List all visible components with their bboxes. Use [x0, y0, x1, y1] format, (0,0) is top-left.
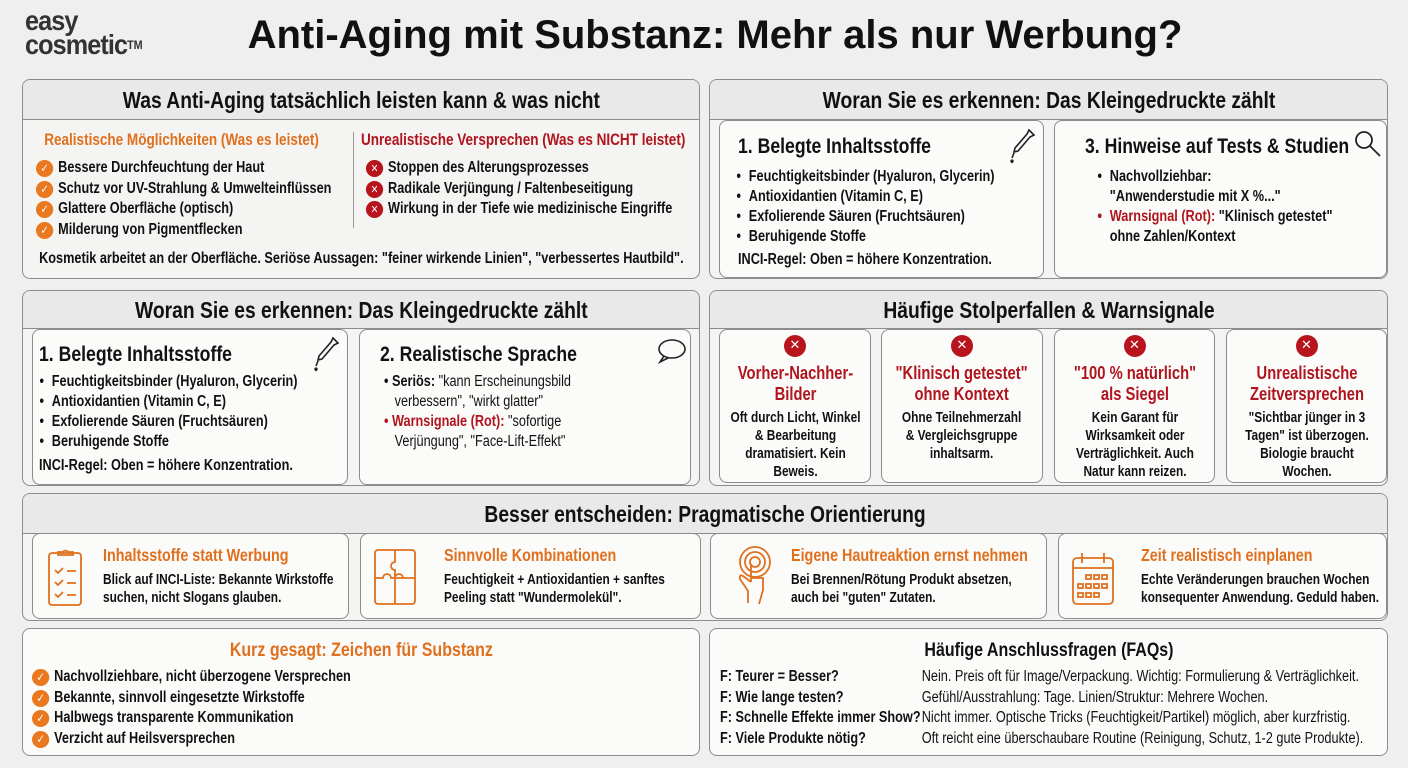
- card: 100% natürlich: Verträglichkeit. Auch: [1076, 446, 1193, 462]
- card: Belegte Inhaltsstoffe: Antioxidantien (Vitamin C, E): [749, 188, 923, 205]
- card: Belegte Inhaltsstoffe: INCI-Regel: Oben = höhere Konzentration.: [738, 251, 992, 268]
- panel: was Anti-Aging leisten kann: [22, 79, 700, 279]
- card: Realistische Sprache: verbessern", "wirkt glatter": [395, 393, 543, 410]
- icon: dropper: [1010, 128, 1036, 164]
- icon: calendar: [1072, 553, 1114, 605]
- card: Hautreaktion: auch bei "guten" Zutaten.: [791, 590, 936, 606]
- card: Belegte Inhaltsstoffe: Beruhigende Stoffe: [749, 228, 866, 245]
- card: Klinisch getestet: ohne Kontext: [915, 384, 1009, 404]
- panel: Kleingedruckte (top right): [709, 79, 1388, 279]
- card: Belegte Inhaltsstoffe: Antioxidantien (Vitamin C, E): [52, 393, 226, 410]
- icon: speech bubble: [658, 339, 686, 364]
- faq list: F: Teurer = Besser?: [720, 668, 839, 685]
- panel: Kleingedruckte (middle left): [22, 290, 700, 486]
- icon: puzzle: [374, 549, 416, 605]
- faq list: Nein. Preis oft für Image/Verpackung. Wichtig: Formulierung & Verträglichkeit.: [922, 668, 1359, 685]
- card: Klinisch getestet: inhaltsarm.: [930, 446, 994, 462]
- card: Zeitversprechen: Wochen.: [1282, 464, 1331, 480]
- heading: [710, 80, 1387, 120]
- card: Tests & Studien: 3. Hinweise auf Tests & Studien: [1085, 134, 1349, 158]
- faq list: F: Schnelle Effekte immer Show?: [720, 709, 921, 726]
- card: Vorher-Nachher: Oft durch Licht, Winkel: [730, 410, 860, 426]
- logo: easy: [25, 5, 77, 36]
- card: Belegte Inhaltsstoffe: Feuchtigkeitsbinder (Hyaluron, Glycerin): [52, 373, 298, 390]
- panel: Besser entscheiden: [22, 493, 1388, 621]
- card: Vorher-Nachher: ✕: [790, 338, 800, 353]
- card: Tests & Studien: Nachvollziehbar:: [1110, 168, 1211, 185]
- heading: [23, 494, 1387, 534]
- card: Zeitversprechen: "Sichtbar jünger in 3: [1248, 410, 1365, 426]
- faq list: Nicht immer. Optische Tricks (Feuchtigkeit/Partikel) möglich, aber kurzfristig.: [922, 709, 1350, 726]
- unrealistic column: [361, 131, 685, 218]
- card: Inhaltsstoffe statt Werbung: Blick auf INCI-Liste: Bekannte Wirkstoffe: [103, 572, 333, 588]
- card: Belegte Inhaltsstoffe: 1. Belegte Inhaltsstoffe: [39, 342, 232, 366]
- icon: clipboard: [48, 550, 82, 606]
- card: Sinnvolle Kombinationen: Feuchtigkeit + Antioxidantien + sanftes: [444, 572, 665, 588]
- card: Sinnvolle Kombinationen: Sinnvolle Kombinationen: [444, 545, 616, 565]
- checklist: [32, 668, 351, 748]
- heading: [23, 80, 699, 120]
- panel: FAQs: [709, 628, 1388, 756]
- card: Belegte Inhaltsstoffe: [719, 120, 1044, 278]
- icon: dropper: [314, 336, 340, 372]
- realistic column: Glattere Oberfläche (optisch): [58, 200, 233, 217]
- faq list: Oft reicht eine überschaubare Routine (Reinigung, Schutz, 1-2 gute Produkte).: [922, 730, 1363, 746]
- checklist: Verzicht auf Heilsversprechen: [54, 730, 235, 747]
- card: Zeit einplanen: konsequenter Anwendung. Geduld haben.: [1141, 590, 1379, 606]
- card: Tests & Studien: •: [1097, 208, 1102, 225]
- card: Inhaltsstoffe statt Werbung: Inhaltsstoffe statt Werbung: [103, 545, 288, 565]
- heading: Was Anti-Aging tatsächlich leisten kann & was nicht: [122, 87, 600, 113]
- card: Klinisch getestet: & Vergleichsgruppe: [906, 428, 1018, 444]
- note: Kosmetik arbeitet an der Oberfläche. Seriöse Aussagen: "feiner wirkende Linien", "verbessertes Hautbild".: [39, 250, 683, 267]
- unrealistic column: Radikale Verjüngung / Faltenbeseitigung: [388, 180, 633, 197]
- heading: [710, 291, 1387, 329]
- icon: touch hand: [738, 546, 771, 604]
- card: Zeitversprechen: Unrealistische: [1256, 363, 1357, 383]
- realistic column: Schutz vor UV-Strahlung & Umwelteinflüssen: [58, 180, 331, 197]
- realistic column: Realistische Möglichkeiten (Was es leistet): [44, 131, 319, 149]
- card: Hautreaktion: Eigene Hautreaktion ernst nehmen: [791, 545, 1028, 565]
- heading: Besser entscheiden: Pragmatische Orientierung: [484, 501, 926, 527]
- card: Tests & Studien: Warnsignal (Rot): "Klinisch getestet": [1110, 208, 1333, 225]
- card: Zeitversprechen: Zeitversprechen: [1249, 384, 1364, 404]
- card: Belegte Inhaltsstoffe: Exfolierende Säuren (Fruchtsäuren): [749, 208, 965, 225]
- heading: Woran Sie es erkennen: Das Kleingedruckte zählt: [135, 297, 587, 323]
- heading: [23, 291, 699, 329]
- card: Belegte Inhaltsstoffe: 1. Belegte Inhaltsstoffe: [738, 134, 931, 158]
- card: Klinisch getestet: [881, 329, 1043, 483]
- card: Realistische Sprache: [359, 329, 691, 485]
- card: 100% natürlich: [1054, 329, 1215, 483]
- card: Vorher-Nachher: Vorher-Nachher-: [737, 363, 853, 383]
- checklist: Halbwegs transparente Kommunikation: [54, 709, 294, 726]
- card: Realistische Sprache: Verjüngung", "Face-Lift-Effekt": [395, 433, 565, 450]
- heading: Woran Sie es erkennen: Das Kleingedruckte zählt: [822, 87, 1275, 113]
- card: Vorher-Nachher: & Bearbeitung: [754, 428, 836, 444]
- card: Sinnvolle Kombinationen: [360, 533, 701, 619]
- card: Belegte Inhaltsstoffe: Beruhigende Stoffe: [52, 433, 169, 450]
- card: 100% natürlich: Kein Garant für: [1091, 410, 1178, 426]
- card: Zeitversprechen: ✕: [1301, 338, 1312, 353]
- realistic column: Bessere Durchfeuchtung der Haut: [58, 159, 264, 176]
- panel: Kurz gesagt: [22, 628, 700, 756]
- card: 100% natürlich: Wirksamkeit oder: [1085, 428, 1184, 444]
- heading: Häufige Anschlussfragen (FAQs): [924, 639, 1173, 661]
- card: Inhaltsstoffe statt Werbung: [32, 533, 349, 619]
- card: Zeitversprechen: [1226, 329, 1387, 483]
- card: Realistische Sprache: • Warnsignale (Rot): "sofortige: [384, 413, 561, 430]
- card: Zeit einplanen: [1058, 533, 1387, 619]
- panel: Stolperfallen: [709, 290, 1388, 486]
- card: Realistische Sprache: • Seriös: "kann Erscheinungsbild: [384, 373, 571, 390]
- checklist: Bekannte, sinnvoll eingesetzte Wirkstoffe: [54, 689, 305, 706]
- card: Realistische Sprache: 2. Realistische Sprache: [380, 342, 577, 366]
- heading: Häufige Stolperfallen & Warnsignale: [883, 297, 1214, 323]
- realistic column: Milderung von Pigmentflecken: [58, 221, 242, 238]
- unrealistic column: Stoppen des Alterungsprozesses: [388, 159, 589, 176]
- card: 100% natürlich: als Siegel: [1100, 384, 1169, 404]
- card: Tests & Studien: "Anwenderstudie mit X %...": [1110, 188, 1281, 205]
- card: Belegte Inhaltsstoffe: [32, 329, 348, 485]
- card: Hautreaktion: [710, 533, 1047, 619]
- unrealistic column: Wirkung in der Tiefe wie medizinische Eingriffe: [388, 200, 672, 217]
- title: Anti-Aging mit Substanz: Mehr als nur Werbung?: [248, 13, 1182, 57]
- card: Klinisch getestet: ✕: [957, 338, 967, 353]
- card: Klinisch getestet: "Klinisch getestet": [896, 363, 1028, 383]
- faq list: F: Viele Produkte nötig?: [720, 730, 866, 746]
- logo: [25, 5, 143, 60]
- card: Vorher-Nachher: dramatisiert. Kein: [745, 446, 845, 462]
- card: Klinisch getestet: Ohne Teilnehmerzahl: [902, 410, 1022, 426]
- faq list: Gefühl/Ausstrahlung: Tage. Linien/Struktur: Mehrere Wochen.: [922, 688, 1268, 706]
- card: Zeit einplanen: Zeit realistisch einplanen: [1141, 545, 1312, 565]
- checklist: Nachvollziehbare, nicht überzogene Versprechen: [54, 668, 351, 685]
- card: Inhaltsstoffe statt Werbung: suchen, nicht Slogans glauben.: [103, 590, 281, 606]
- card: Vorher-Nachher: [719, 329, 871, 483]
- card: 100% natürlich: "100 % natürlich": [1073, 363, 1196, 383]
- faq list: [720, 668, 1363, 746]
- card: Zeitversprechen: Tagen" ist überzogen.: [1245, 428, 1368, 444]
- faq list: F: Wie lange testen?: [720, 688, 843, 706]
- card: Belegte Inhaltsstoffe: Feuchtigkeitsbinder (Hyaluron, Glycerin): [749, 168, 995, 185]
- card: Belegte Inhaltsstoffe: INCI-Regel: Oben = höhere Konzentration.: [39, 457, 293, 474]
- card: Vorher-Nachher: Bilder: [774, 384, 816, 404]
- unrealistic column: Unrealistische Versprechen (Was es NICHT leistet): [361, 131, 685, 149]
- card: Belegte Inhaltsstoffe: Exfolierende Säuren (Fruchtsäuren): [52, 413, 268, 430]
- card: Tests & Studien: [1054, 120, 1387, 278]
- card: Zeitversprechen: Biologie braucht: [1260, 446, 1353, 462]
- card: Hautreaktion: Bei Brennen/Rötung Produkt absetzen,: [791, 572, 1012, 588]
- card: Zeit einplanen: Echte Veränderungen brauchen Wochen: [1141, 572, 1369, 588]
- card: 100% natürlich: Natur kann reizen.: [1083, 464, 1186, 480]
- heading: Kurz gesagt: Zeichen für Substanz: [230, 639, 492, 661]
- card: 100% natürlich: ✕: [1129, 338, 1140, 353]
- card: Sinnvolle Kombinationen: Peeling statt "Wundermolekül".: [444, 590, 622, 606]
- card: Tests & Studien: ohne Zahlen/Kontext: [1110, 228, 1235, 245]
- logo: cosmeticTM: [25, 29, 143, 60]
- icon: magnifier: [1355, 131, 1381, 157]
- realistic column: [36, 131, 331, 239]
- card: Vorher-Nachher: Beweis.: [773, 464, 817, 480]
